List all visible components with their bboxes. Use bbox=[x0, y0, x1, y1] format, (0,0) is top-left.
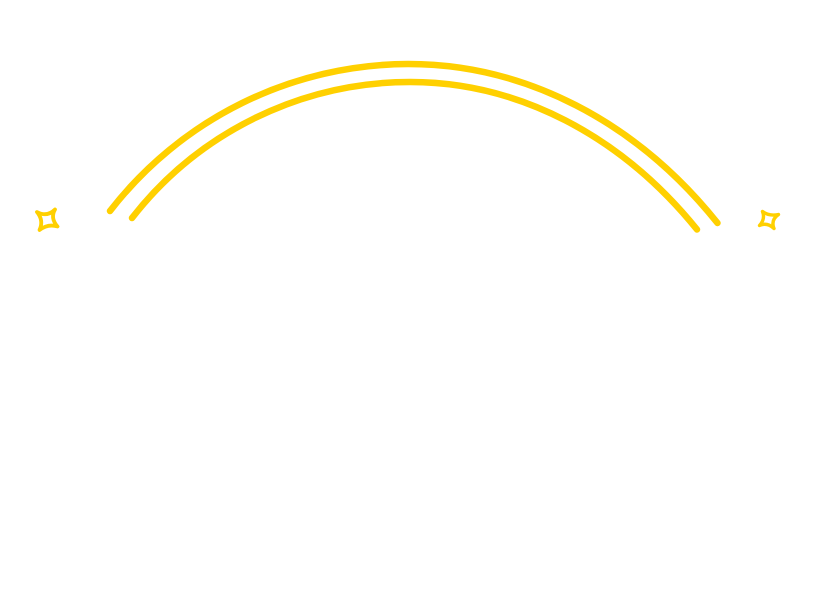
arc: outer bbox=[110, 64, 718, 223]
arc: inner bbox=[132, 82, 697, 230]
icon: left sparkle bbox=[37, 210, 58, 230]
icon: right sparkle bbox=[760, 212, 778, 228]
